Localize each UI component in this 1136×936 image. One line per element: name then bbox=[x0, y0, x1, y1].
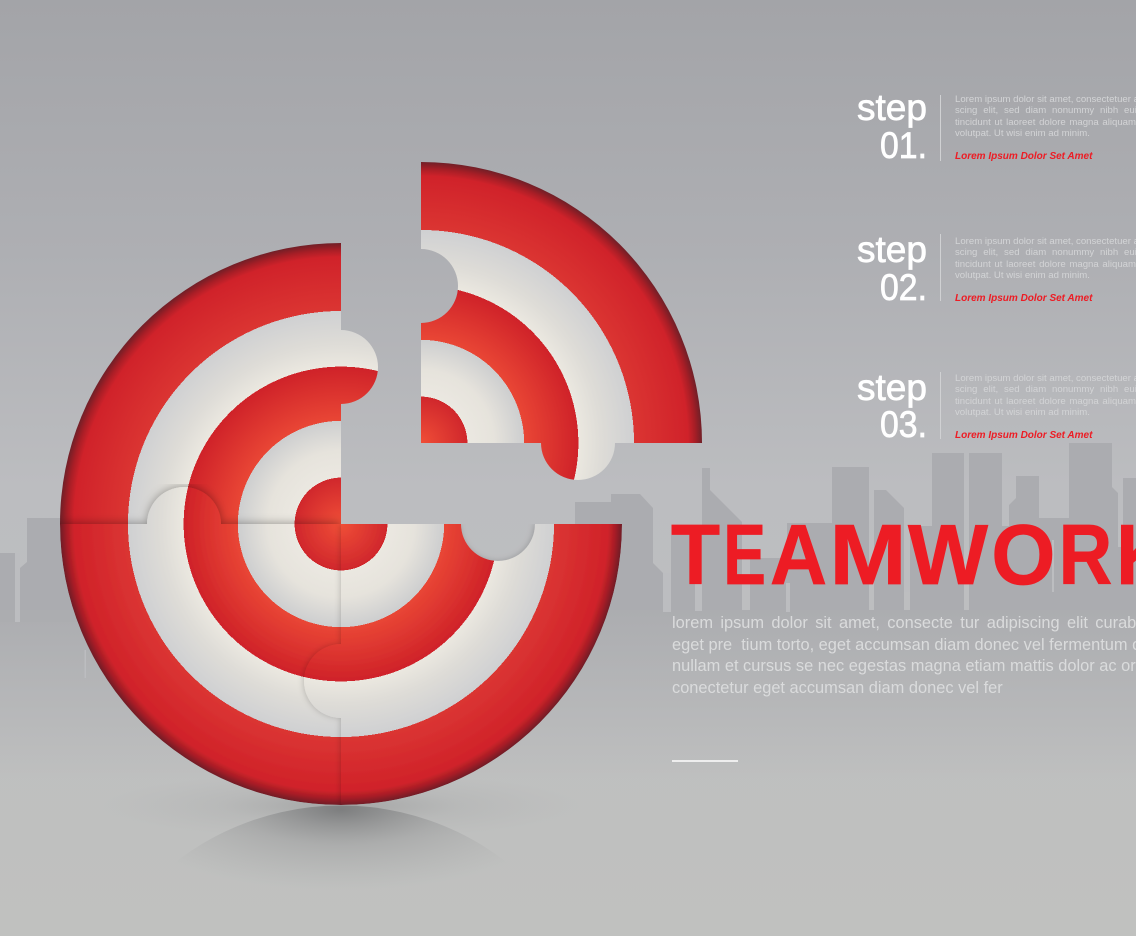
step 01: Lorem Ipsum Dolor Set Amet bbox=[955, 151, 1093, 162]
step 02: Lorem Ipsum Dolor Set Amet bbox=[955, 293, 1093, 304]
step 02: step bbox=[857, 229, 927, 270]
title: A bbox=[770, 508, 827, 603]
title: E bbox=[723, 508, 766, 603]
body paragraph bbox=[672, 614, 1136, 697]
step 01: 01. bbox=[880, 125, 927, 166]
puzzle piece: bottom left bbox=[60, 484, 341, 805]
title: T bbox=[671, 508, 720, 603]
step 01: step bbox=[857, 87, 927, 128]
title: W bbox=[908, 508, 989, 603]
accent line bbox=[672, 760, 738, 762]
puzzle piece: bottom right bbox=[301, 524, 622, 805]
step 03: Lorem Ipsum Dolor Set Amet bbox=[955, 430, 1093, 441]
step 01 bbox=[857, 87, 1136, 166]
body paragraph: conectetur eget accumsan diam donec vel fer bbox=[672, 679, 1003, 697]
puzzle piece: top left bbox=[60, 243, 378, 524]
step 03: volutpat. Ut wisi enim ad minim. bbox=[955, 407, 1090, 418]
step 02 bbox=[857, 229, 1136, 308]
title: M bbox=[830, 508, 906, 603]
puzzle target bbox=[60, 162, 702, 805]
step 01: volutpat. Ut wisi enim ad minim. bbox=[955, 128, 1090, 139]
puzzle piece: top right (displaced) bbox=[421, 162, 702, 480]
title: O bbox=[991, 508, 1055, 603]
city skyline bbox=[0, 443, 1136, 780]
step 02: volutpat. Ut wisi enim ad minim. bbox=[955, 270, 1090, 281]
step 02: 02. bbox=[880, 267, 927, 308]
step 03 bbox=[857, 367, 1136, 445]
step 03: step bbox=[857, 367, 927, 408]
title: R bbox=[1059, 508, 1112, 603]
step 03: 03. bbox=[880, 404, 927, 445]
ground shadow and reflection bbox=[101, 772, 581, 907]
